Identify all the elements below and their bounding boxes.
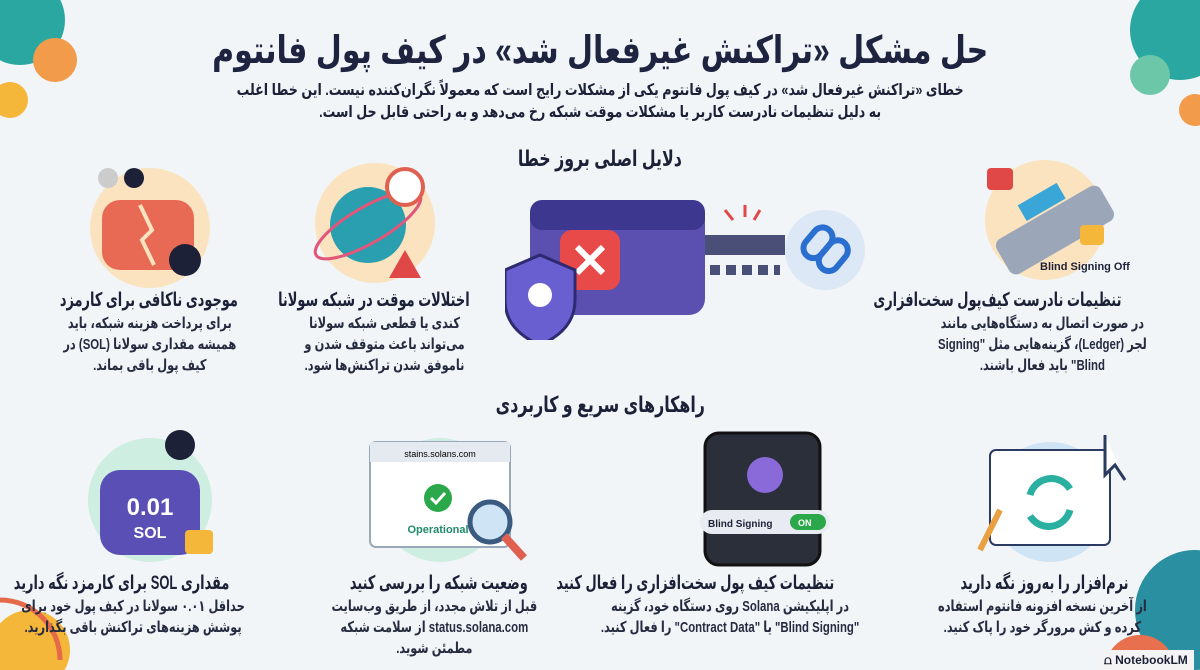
solution 4: [938, 572, 1147, 636]
icon: status page: stains.solans.com: [404, 449, 476, 459]
icon: phone blind signing: [700, 432, 830, 566]
solution 2: قبل از تلاش مجدد، از طریق وب‌سایت: [332, 598, 538, 615]
icon: status page: Operational: [407, 524, 469, 536]
icon: globe clock: [314, 163, 435, 283]
icon: broken wallet: [90, 168, 210, 288]
cause 2: اختلالات موقت در شبکه سولانا: [278, 290, 470, 311]
heading: causes: دلایل اصلی بروز خطا: [518, 146, 682, 171]
heading: solutions: راهکارهای سریع و کاربردی: [495, 392, 705, 417]
solution 2: status.solana.com از سلامت شبکه: [341, 619, 529, 636]
cause 2: می‌تواند باعث متوقف شدن و: [305, 336, 465, 353]
intro text: به دلیل تنظیمات نادرست کاربر یا مشکلات موقت شبکه رخ می‌دهد و به راحتی قابل حل است.: [319, 104, 881, 121]
icon: phone blind signing: ON: [798, 518, 812, 528]
solution 3: تنظیمات کیف پول سخت‌افزاری را فعال کنید: [557, 573, 835, 594]
solution 1: مقداری SOL برای کارمزد نگه دارید: [14, 573, 229, 594]
icon: phone blind signing: Blind Signing: [708, 519, 772, 530]
badge: NotebookLM: [1098, 650, 1194, 670]
cause 1: موجودی ناکافی برای کارمزد: [60, 290, 238, 311]
illustration: broken wallet and chain: [505, 200, 865, 340]
solution 3: "Blind Signing" یا "Contract Data" را فعال کنید.: [601, 619, 859, 636]
solution 2: مطمئن شوید.: [397, 640, 473, 657]
cause 2: کندی یا قطعی شبکه سولانا: [310, 315, 460, 332]
cause 3: لجر (Ledger)، گزینه‌هایی مثل "Signing: [938, 336, 1147, 353]
cause 3: [874, 290, 1147, 374]
icon: hardware wallet: [985, 160, 1114, 370]
intro text: [236, 79, 963, 121]
icon: SOL wallet: SOL: [134, 525, 167, 542]
cause 2: [278, 290, 470, 374]
solution 4: نرم‌افزار را به‌روز نگه دارید: [961, 573, 1129, 594]
icon: status page: [369, 438, 527, 562]
badge: NotebookLM: ⩍ NotebookLM: [1104, 653, 1188, 667]
cause 3: در صورت اتصال به دستگاه‌هایی مانند: [941, 315, 1144, 332]
icon: SOL wallet: [88, 360, 1044, 562]
solution 2: [332, 573, 538, 657]
solution 4: از آخرین نسخه افزونه فانتوم استفاده: [938, 598, 1147, 615]
label: blind signing off: Blind Signing Off: [1040, 261, 1130, 273]
solution 4: کرده و کش مرورگر خود را پاک کنید.: [944, 619, 1141, 636]
cause 1: کیف پول باقی بماند.: [93, 357, 207, 374]
cause 3: Blind" باید فعال باشند.: [980, 357, 1105, 374]
solution 2: وضعیت شبکه را بررسی کنید: [350, 573, 528, 594]
cause 2: ناموفق شدن تراکنش‌ها شود.: [305, 357, 465, 374]
solution 3: در اپلیکیشن Solana روی دستگاه خود، گزینه: [611, 598, 849, 615]
intro text: خطای «تراکنش غیرفعال شد» در کیف پول فانتوم یکی از مشکلات رایج است که معمولاً نگران‌کننده نیست. این خطا اغلب: [236, 82, 963, 99]
solution 1: [14, 572, 245, 636]
solution 1: حداقل ۰.۰۱ سولانا در کیف پول خود برای: [21, 598, 245, 615]
cause 1: برای پرداخت هزینه شبکه، باید: [68, 315, 232, 332]
solution 1: پوشش هزینه‌های تراکنش باقی بگذارید.: [24, 619, 242, 636]
icon: browser refresh: [977, 435, 1126, 562]
title: حل مشکل «تراکنش غیرفعال شد» در کیف پول فانتوم: [212, 30, 988, 72]
solution 3: [557, 573, 859, 636]
cause 1: [60, 290, 238, 374]
cause 3: تنظیمات نادرست کیف‌پول سخت‌افزاری: [874, 290, 1122, 311]
cause 1: همیشه مقداری سولانا (SOL) در: [63, 336, 237, 353]
icon: SOL wallet: 0.01: [127, 494, 173, 521]
